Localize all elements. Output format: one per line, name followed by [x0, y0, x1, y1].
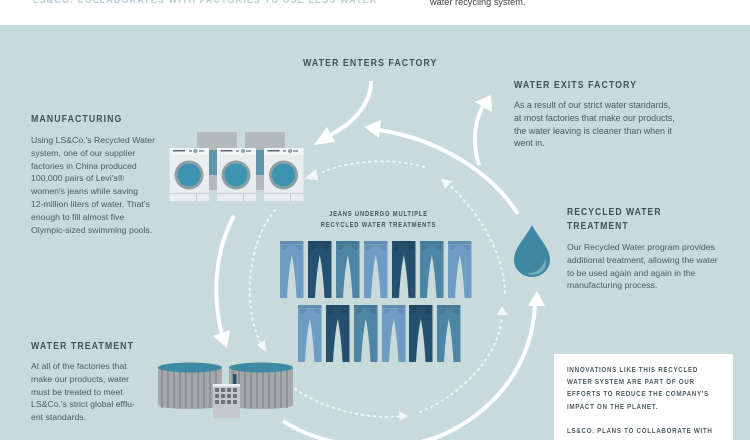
heading: MANUFACTURING [31, 114, 122, 125]
arrow: treatment to recycled water [283, 291, 545, 440]
icon: water drop [514, 225, 550, 277]
body text: the water leaving is cleaner than when it [514, 126, 672, 136]
arrow: water enters factory [314, 81, 371, 145]
body text: Using LS&Co.'s Recycled Water [31, 135, 155, 145]
dotted arrowheads [257, 169, 508, 421]
jeans bottom row [298, 305, 460, 362]
callout text: EFFORTS TO REDUCE THE COMPANY'S [567, 389, 709, 398]
body text: manufacturing process. [567, 280, 657, 290]
body text: enough to fill almost five [31, 212, 124, 222]
body text: must be treated to meet [31, 387, 123, 397]
panel: manufacturing [31, 114, 155, 235]
body text [31, 361, 135, 422]
panel: recycled water treatment [567, 207, 718, 290]
body text: make our products, water [31, 374, 129, 384]
arrow: to water exits [364, 120, 518, 214]
heading: RECYCLED WATER [567, 207, 662, 218]
tank right [229, 362, 293, 409]
body text: As a result of our strict water standards, [514, 100, 670, 110]
body text: at most factories that make our products, [514, 113, 675, 123]
body text [514, 100, 675, 148]
body text: LS&Co.'s strict global efflu- [31, 399, 135, 409]
icon: washing machines [170, 132, 304, 201]
callout text: WATER SYSTEM ARE PART OF OUR [567, 377, 695, 386]
heading: water enters factory: WATER ENTERS FACTORY [303, 58, 437, 69]
machines behind [197, 132, 285, 190]
arrow: manufacturing to water treatment [213, 216, 234, 348]
body text: factories in China produced [31, 161, 137, 171]
arrow: water exits factory [475, 95, 492, 165]
callout [554, 354, 733, 440]
body text: Olympic-sized swimming pools. [31, 225, 152, 235]
panel: water treatment [31, 341, 135, 422]
heading: jeans undergo treatments: RECYCLED WATER TREATMENTS [320, 220, 436, 229]
header band [0, 0, 750, 25]
body text: 100,000 pairs of Levi's® [31, 173, 124, 183]
body text: to be used again and again in the [567, 268, 696, 278]
callout text: INNOVATIONS LIKE THIS RECYCLED [567, 365, 698, 374]
body text: system, one of our supplier [31, 148, 135, 158]
body text: women's jeans while saving [31, 186, 138, 196]
tank left [158, 362, 222, 409]
icon: treatment tanks [158, 362, 293, 418]
heading [567, 207, 662, 232]
heading: jeans undergo treatments: JEANS UNDERGO MULTIPLE [329, 209, 427, 218]
machine 2 [217, 148, 256, 201]
body text [31, 135, 155, 235]
dotted circle [250, 161, 505, 417]
callout text: IMPACT ON THE PLANET. [567, 402, 658, 411]
body text: At all of the factories that [31, 361, 127, 371]
machine 1 [170, 148, 209, 201]
body text: 12-million liters of water. That's [31, 199, 150, 209]
body text: ent standards. [31, 412, 86, 422]
heading: TREATMENT [567, 221, 629, 232]
heading: WATER TREATMENT [31, 341, 134, 352]
body text [567, 242, 718, 290]
body text: Our Recycled Water program provides [567, 242, 715, 252]
heading: jeans undergo treatments [320, 209, 436, 229]
jeans top row [280, 241, 472, 298]
machine 3 [264, 148, 304, 201]
body text: additional treatment, allowing the water [567, 255, 718, 265]
body text: went in. [514, 138, 545, 148]
callout text [567, 365, 713, 435]
callout text: LS&CO. PLANS TO COLLABORATE WITH [567, 426, 713, 435]
panel: water exits factory [514, 80, 675, 148]
pump building [213, 374, 240, 418]
heading: WATER EXITS FACTORY [514, 80, 637, 91]
